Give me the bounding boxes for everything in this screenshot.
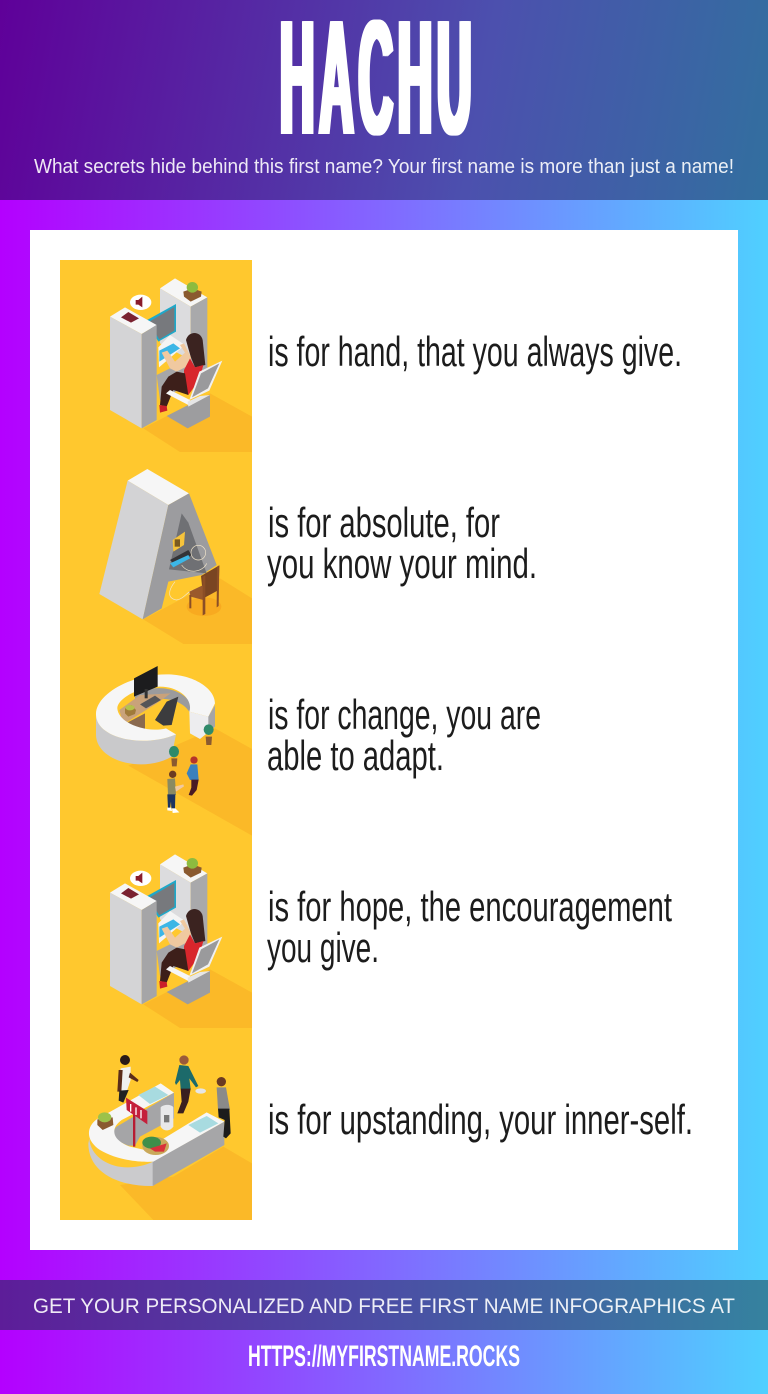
icon: letter U cafeteria [88, 1055, 252, 1220]
text row 2: is for absolute, for [268, 499, 500, 546]
footer band [0, 1280, 768, 1330]
footer call to action: GET YOUR PERSONALIZED AND FREE FIRST NAME INFOGRAPHICS AT [33, 1294, 735, 1318]
text row 3: is for change, you are [268, 691, 541, 738]
text row 4 [267, 883, 672, 971]
header band [0, 0, 768, 200]
text row 2: you know your mind. [267, 540, 537, 587]
icon: letter H office repeated [110, 854, 252, 1028]
text row 3 [267, 691, 541, 779]
yellow image column [60, 260, 252, 1220]
icon: letter A desk [99, 469, 252, 644]
icon: letter C reception [96, 666, 252, 836]
white card panel [30, 230, 738, 1250]
text row 3: able to adapt. [267, 732, 444, 779]
text row 2 [267, 499, 537, 587]
subtitle: What secrets hide behind this first name? Your first name is more than just a name! [34, 155, 734, 178]
text row 4: you give. [267, 924, 379, 971]
footer url: HTTPS://MYFIRSTNAME.ROCKS [248, 1340, 520, 1373]
icon: letter H office [110, 278, 252, 452]
